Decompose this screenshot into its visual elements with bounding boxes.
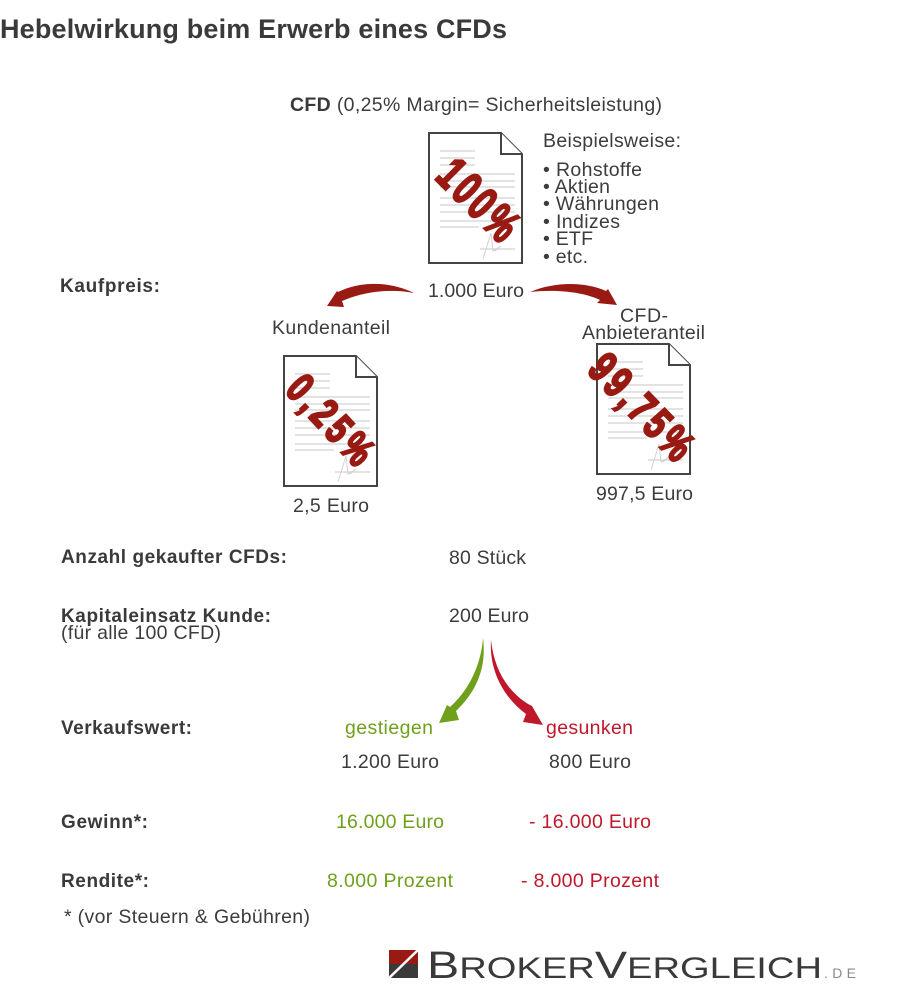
label: Kundenanteil: Kundenanteil [272,317,390,339]
document icon: 0,25%: 0,25% [277,365,387,478]
amount: 997,5 Euro: 997,5 Euro [596,483,693,505]
row: Verkaufswert: gestiegen [345,717,433,739]
arrow: to Kundenanteil [327,284,414,307]
label: CFD-Anbieteranteil: Anbieteranteil [582,322,705,344]
row: Kapitaleinsatz Kunde [61,605,529,644]
document icon: 99,75%: 99,75% [579,344,707,474]
row: Rendite: Rendite*: [61,871,149,892]
example list: • Indizes [543,211,620,233]
label: CFD-Anbieteranteil: CFD- [620,305,668,327]
example list [543,130,681,268]
example list: Beispielsweise: [543,130,681,152]
row: Verkaufswert: gesunken [546,717,633,739]
row: Anzahl gekaufter CFDs: 80 Stück [449,547,526,569]
row: Kapitaleinsatz Kunde: Kapitaleinsatz Kunde: [61,606,271,627]
row: Gewinn [61,811,651,833]
row: Gewinn: - 16.000 Euro [529,811,651,833]
subtitle: CFD margin: CFD (0,25% Margin= Sicherheitsleistung) [290,94,662,116]
row: Gewinn: 16.000 Euro [336,811,444,833]
logo: BrokerVergleich.de: BROKER VERGLEICH [427,945,822,987]
example list: • Rohstoffe [543,159,642,181]
document icon: 100%: 100% [427,148,533,255]
row: Verkaufswert: Verkaufswert: [61,718,192,739]
row: Rendite: - 8.000 Prozent [521,870,660,892]
row: Verkaufswert [61,717,633,773]
row: Gewinn: Gewinn*: [61,812,148,833]
example list: • Aktien [543,176,610,198]
row: Anzahl gekaufter CFDs [61,547,526,569]
row: Rendite [61,870,660,892]
label: CFD-Anbieteranteil [582,305,705,344]
arrow: gesunken [491,640,543,725]
arrow: gestiegen [439,638,484,723]
logo: BrokerVergleich.de: .DE [824,965,856,981]
title: Hebelwirkung beim Erwerb eines CFDs [0,14,507,44]
example list: • Währungen [543,193,659,215]
arrow: to CFD-Anbieteranteil [530,284,617,305]
row: Verkaufswert: 1.200 Euro [341,751,439,773]
row: Anzahl gekaufter CFDs: Anzahl gekaufter CFDs: [61,547,287,568]
example list: • ETF [543,228,593,250]
amount: 2,5 Euro: 2,5 Euro [293,495,369,517]
row: Verkaufswert: 800 Euro [549,751,631,773]
footnote: * (vor Steuern & Gebühren) [64,906,310,928]
row: Kapitaleinsatz Kunde: (für alle 100 CFD) [61,622,221,644]
row: Kapitaleinsatz Kunde: 200 Euro [449,605,529,627]
example list: • etc. [543,246,588,268]
price: 1.000 Euro: 1.000 Euro [428,280,524,302]
row: Rendite: 8.000 Prozent [327,870,454,892]
label: Kaufpreis: Kaufpreis: [60,276,160,297]
